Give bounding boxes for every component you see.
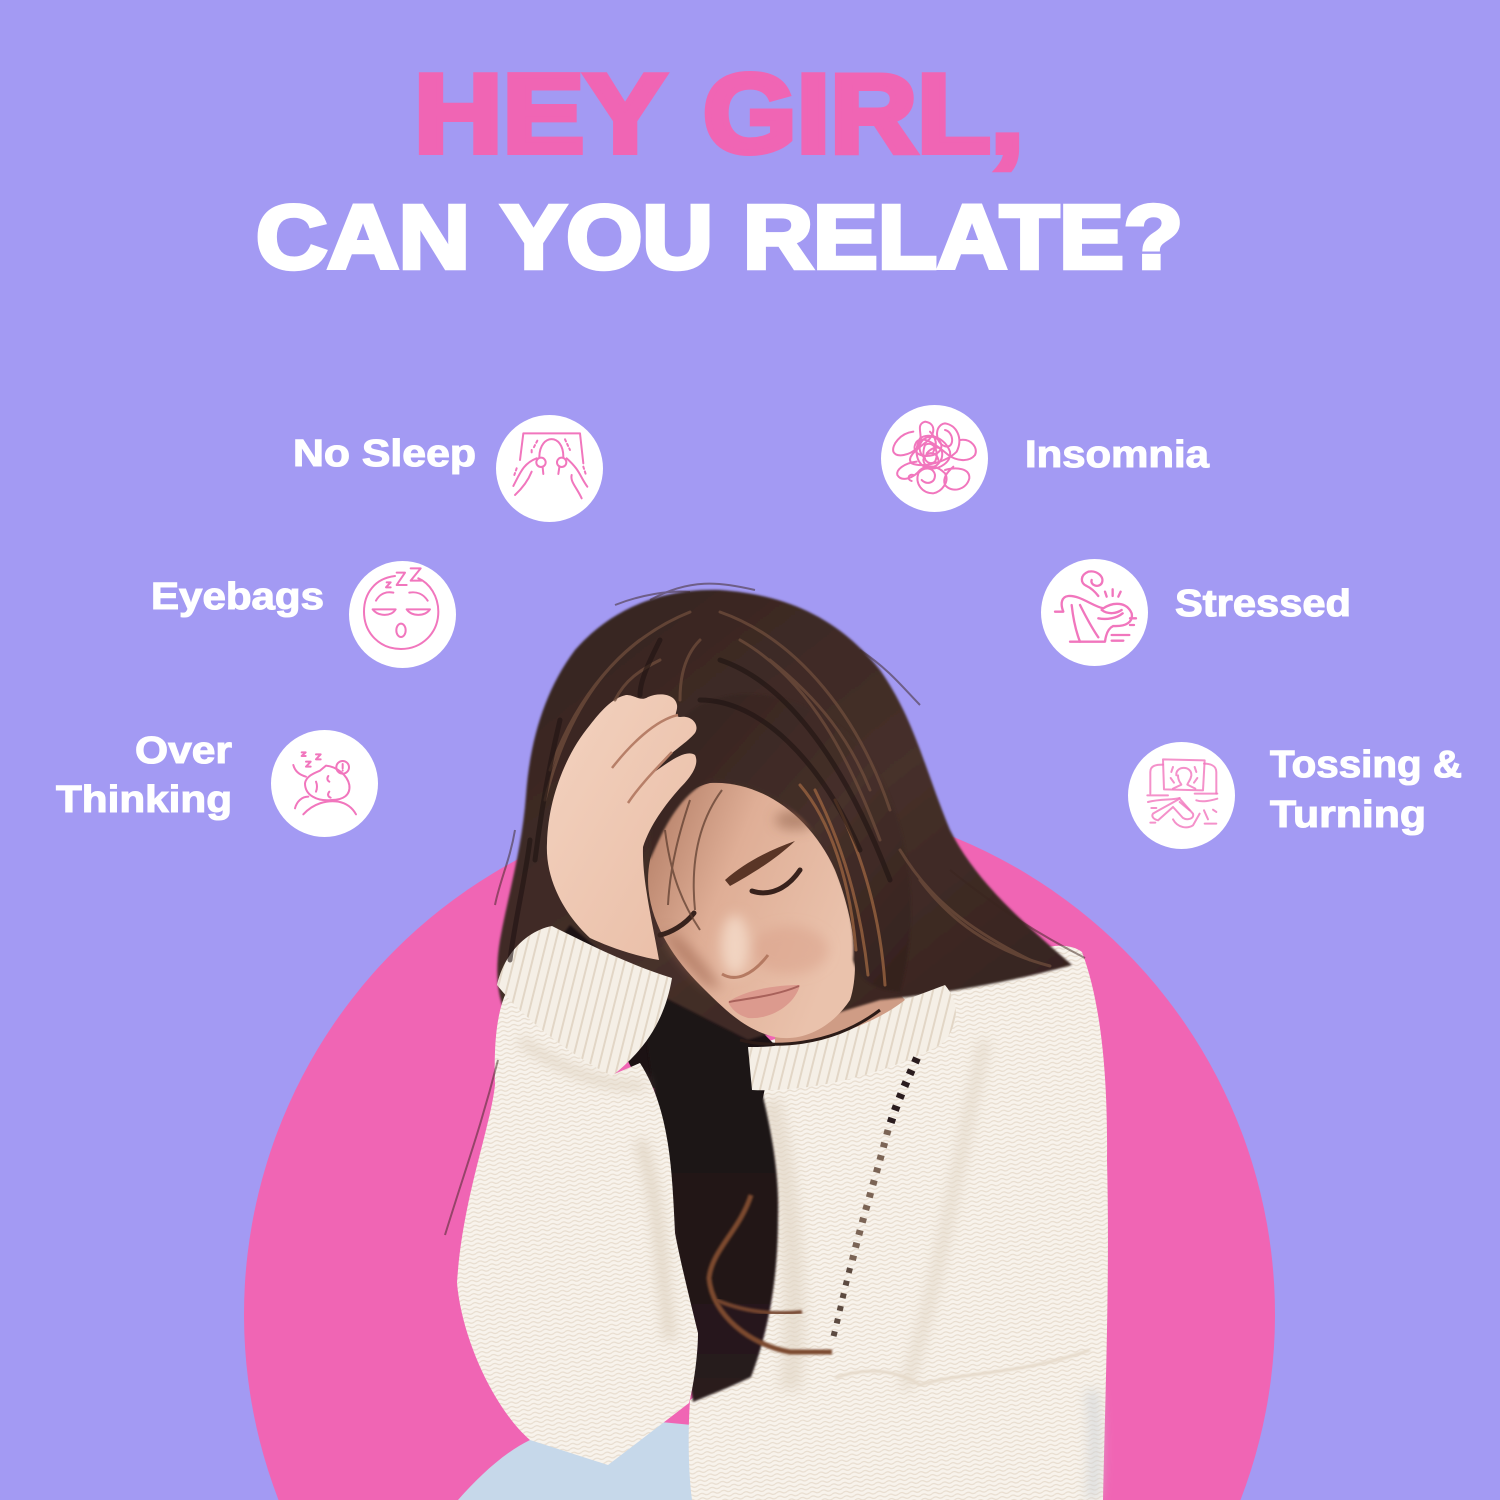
pink circle backdrop [244, 799, 1275, 1500]
eye left [660, 913, 694, 935]
label second line: Thinking [56, 779, 232, 821]
icon: person curled over [1055, 571, 1136, 642]
subtitle: can you relate [256, 188, 1183, 288]
sleeve shading [520, 1040, 670, 1340]
lip line [729, 986, 799, 1002]
subtitle: can you relate: YOU [501, 188, 713, 288]
title: hey girl [414, 52, 1024, 176]
hair highlights [510, 612, 1050, 985]
dark fill behind cuff and chin [555, 915, 775, 1110]
subtitle: can you relate: RELATE? [743, 188, 1183, 288]
icon: person restless in bed [1147, 759, 1217, 827]
sweater neckline ribbing [748, 985, 956, 1090]
icon: face on pillow held by hands [513, 433, 587, 498]
sweater body [689, 946, 1108, 1500]
lips [728, 985, 800, 1018]
sleeve cuff [497, 926, 672, 1076]
stray hair wisps [445, 584, 1085, 1235]
label: Insomnia [1025, 434, 1210, 476]
icon disc [1041, 559, 1148, 666]
label: Eyebags [151, 576, 324, 618]
body shading [770, 1040, 1095, 1500]
eyebrow right [725, 841, 795, 886]
icon: person lying awake [293, 752, 356, 814]
jeans [458, 1420, 694, 1500]
label: No Sleep [293, 433, 476, 475]
icon disc [349, 561, 456, 668]
callout: tossing and turning [1128, 742, 1462, 849]
collar dark edge [740, 1010, 880, 1044]
photo: stressed woman in white sweater [445, 584, 1108, 1500]
face [648, 783, 855, 1038]
callout: no sleep [293, 415, 603, 522]
hand [547, 694, 697, 960]
icon: tangled scribble [893, 422, 976, 493]
neck [775, 960, 905, 1045]
brown hair strand [709, 1195, 832, 1352]
icon disc [881, 405, 988, 512]
icon disc [1128, 742, 1235, 849]
lower dark hair [640, 985, 778, 1402]
label: Over [135, 730, 232, 772]
finger gaps [612, 715, 678, 803]
openwork stitch [832, 1058, 917, 1342]
label: Tossing & [1270, 744, 1462, 786]
label: Stressed [1175, 583, 1351, 625]
upper hair mass [497, 590, 1072, 1040]
callout: over thinking [56, 730, 378, 837]
icon disc [496, 415, 603, 522]
callout: eyebags [151, 561, 456, 668]
title: hey girl: GIRL, [703, 52, 1024, 176]
eye right [752, 870, 800, 893]
front hair right of face [650, 694, 911, 992]
second strand [716, 1300, 802, 1313]
forearm crease [835, 1350, 1090, 1385]
subtitle: can you relate: CAN [256, 188, 470, 288]
callout: stressed [1041, 559, 1351, 666]
label second line: Turning [1270, 794, 1426, 836]
nose outline [722, 955, 768, 977]
left sleeve [457, 985, 698, 1465]
icon disc [271, 730, 378, 837]
cheek and nose shadow [665, 810, 828, 990]
callout: insomnia [881, 405, 1210, 512]
icon: sleepy face [364, 568, 438, 649]
title: hey girl: HEY [414, 52, 666, 176]
hair strands over forehead [665, 790, 722, 930]
